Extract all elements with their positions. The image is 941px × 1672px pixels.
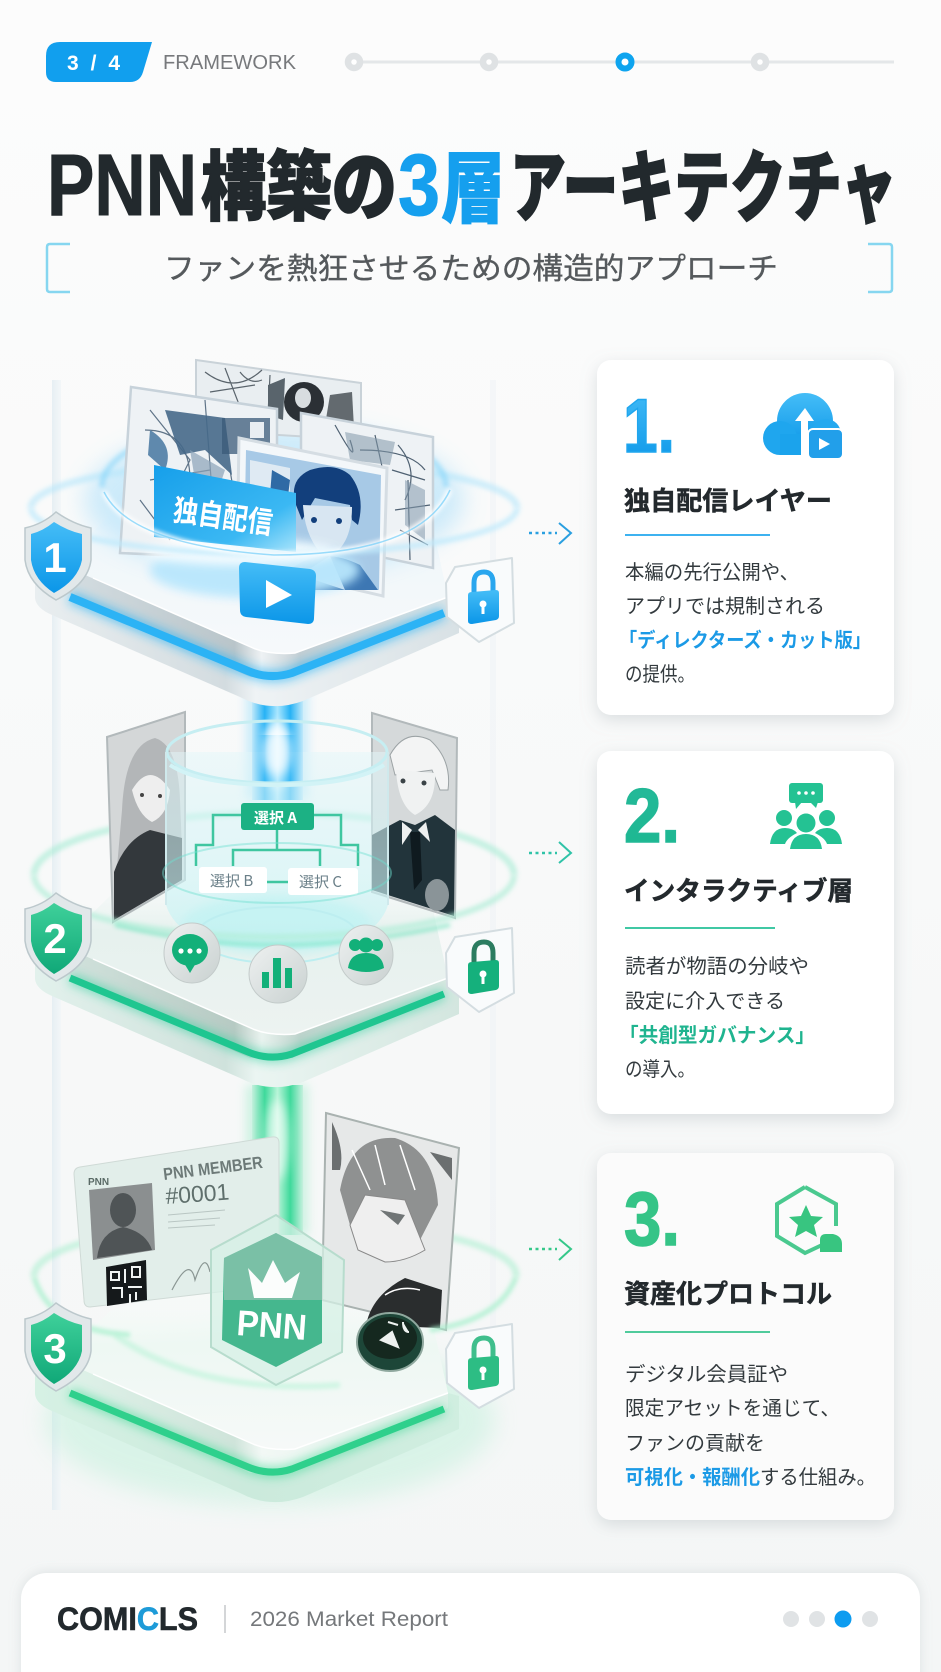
title: PNN [47,137,197,234]
decision tree [196,803,358,895]
page dots [783,1610,878,1628]
tag: 独自配信 [154,465,296,552]
character card left [107,712,185,922]
layer 1 illustration [31,360,517,706]
subtitle with brackets [47,244,892,292]
option A: 選択 A [254,807,297,828]
card body: 可視化・報酬化 [625,1461,760,1490]
title [47,126,897,239]
progress track [348,56,894,68]
icon: community chat [770,783,842,849]
header: step badge and progress [46,42,894,82]
lock 1 [446,558,514,642]
member photo [89,1183,155,1260]
member id card [74,1137,279,1307]
card body: 限定アセットを通じて、 [625,1392,840,1421]
card body [625,1358,876,1490]
coin [357,1313,423,1371]
play button [239,562,316,624]
footer bar [21,1573,920,1672]
card body: デジタル会員証や [625,1358,788,1387]
badge 2: shield: 2 [43,915,67,962]
energy rings: back [31,419,517,508]
icon: community [339,925,393,985]
glass columns [52,380,496,1510]
energy ring 3: back [34,1232,516,1277]
card body: の導入。 [625,1053,695,1082]
platform 2 [35,846,459,1087]
step badge: 3 / 4 [67,52,120,75]
badge 1: shield: 1 [43,534,67,581]
hex crystal PNN [211,1215,344,1385]
card body [619,950,815,1082]
member id card: #0001 [165,1179,230,1209]
badge 3: shield [25,1303,91,1391]
manga panel back [196,360,361,440]
member id card: PNN MEMBER [162,1153,264,1184]
manga panel left [120,387,277,560]
platform 3 [35,1261,459,1502]
card body: 「共創型ガバナンス」 [619,1019,815,1048]
lock 2 [446,928,514,1012]
connector pillar: green [246,1085,308,1235]
manga panel front: character [237,438,387,596]
step badge [46,42,152,82]
connector pillar: blue [246,690,308,800]
report label: 2026 Market Report [250,1608,448,1631]
glass cylinder [166,721,388,963]
card 3: 資産化プロトコル [597,1153,894,1520]
hex crystal PNN: PNN [235,1302,308,1348]
card body: アプリでは規制される [625,590,825,619]
card body: 読者が物語の分岐や [625,950,809,979]
back glow [84,425,464,575]
card 2: インタラクティブ層 [597,751,894,1114]
arrow 2 [529,842,571,863]
number 1: 1. [623,384,675,469]
card heading: 独自配信レイヤー [624,481,832,518]
light core [145,539,335,565]
option C: 選択 C [299,871,342,892]
number 3: 3. [624,1177,680,1262]
platform 1 [35,465,459,706]
option B [199,867,267,893]
title: 層 [441,127,505,239]
card body: ファンの貢献を [625,1427,765,1456]
title: 構築の [201,126,397,236]
icon: hex star asset [777,1187,842,1253]
card body: する仕組み。 [760,1461,876,1490]
light pool [150,542,360,598]
manga panel right [301,413,433,568]
layer 3 illustration [34,1113,516,1505]
card heading: インタラクティブ層 [624,871,853,908]
badge 3: shield: 3 [43,1325,67,1372]
card body: 設定に介入できる [625,985,785,1014]
icon: chat [164,923,220,983]
layer 2 illustration [34,712,514,1087]
subtitle with brackets: ファンを熱狂させるための構造的アプローチ [164,244,778,288]
arrow 3 [529,1239,571,1260]
tag: 独自配信: 独自配信 [171,485,276,543]
member id card: PNN [88,1177,109,1188]
card 1: 独自配信レイヤー [597,360,894,715]
platform glow [45,1335,495,1505]
arrow 1 [529,523,571,544]
energy ring 3: front [34,1277,516,1386]
card body [619,556,871,687]
option A [241,803,314,830]
lock 3 [446,1324,514,1408]
framework label: FRAMEWORK [163,52,297,74]
option C [288,868,358,895]
number 2: 2. [624,774,680,859]
badge 1: shield [25,512,91,600]
logo: COMICLS [57,1601,198,1637]
energy rings: front [31,490,517,555]
icon: cloud upload [763,393,843,459]
option B: 選択 B [210,870,253,891]
card heading: 資産化プロトコル [624,1274,832,1311]
qr code [106,1260,147,1306]
energy ring 2: front [34,843,514,945]
title: 3 [398,137,440,234]
crown [248,1260,300,1298]
energy ring 2: back [34,813,514,875]
card body: 本編の先行公開や、 [625,556,799,585]
collectible card [322,1113,459,1330]
card body: の提供。 [625,658,695,687]
badge 2: shield [25,893,91,981]
card body: 「ディレクターズ・カット版」 [619,624,871,653]
character card right [372,713,457,918]
icon: bar chart [249,945,307,1003]
